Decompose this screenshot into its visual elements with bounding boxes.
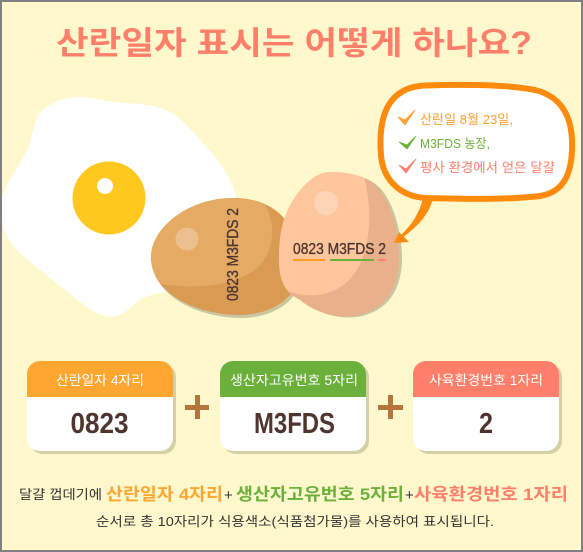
brown egg highlight [176,228,198,250]
check item 3: 평사 환경에서 얻은 달걀 [420,160,555,175]
header label: 산란일자 4자리 [56,373,144,388]
egg white [2,97,240,317]
card shadow [30,364,176,454]
pink egg body [279,172,399,316]
pink egg highlight [314,191,338,215]
explanation line 1: 달걀 껍데기에 [19,487,102,502]
explanation line 1: + [224,487,233,504]
plus sign 2 [378,395,403,419]
brown egg code: 0823 M3FDS 2 [225,208,242,301]
explanation line 1: 사육환경번호 1자리 [414,485,568,504]
brown egg shadow [153,201,300,318]
pink egg [279,172,402,318]
card shadow [223,364,369,454]
header label: 사육환경번호 1자리 [429,373,543,388]
egg yolk [72,162,146,234]
card: environment number [413,361,562,454]
card header [220,361,366,397]
card: producer number [220,361,369,454]
fried egg illustration [2,97,240,317]
card body [27,361,173,451]
bubble body [380,85,572,199]
card: laying date [27,361,176,454]
card body [413,361,559,451]
card shadow [416,364,562,454]
bubble tail and arrow [394,198,433,243]
pink egg code: 0823 M3FDS 2 [293,241,386,258]
card body [220,361,366,451]
card value: 2 [479,408,493,440]
card header [413,361,559,397]
card header [27,361,173,397]
pink egg shadow [282,173,402,317]
card value: 0823 [70,408,128,440]
header label: 생산자고유번호 5자리 [230,373,358,388]
check item 1: 산란일 8월 23일, [420,112,513,127]
explanation line 1: + [405,487,414,504]
yolk highlight [97,178,113,194]
explanation line 1: 산란일자 4자리 [106,485,223,504]
check item 2: M3FDS 농장, [420,136,490,151]
title: 산란일자 표시는 어떻게 하나요? [56,25,532,61]
code underlines [293,259,386,261]
explanation line 1 [19,485,568,504]
explanation line 2: 순서로 총 10자리가 식용색소(식품첨가물)를 사용하여 표시됩니다. [96,514,494,529]
speech bubble callout [380,85,572,243]
explanation line 1: 생산자고유번호 5자리 [236,485,404,504]
brown egg [151,198,294,318]
brown egg body [151,198,290,315]
card value: M3FDS [254,408,335,440]
plus sign 1 [185,395,209,419]
